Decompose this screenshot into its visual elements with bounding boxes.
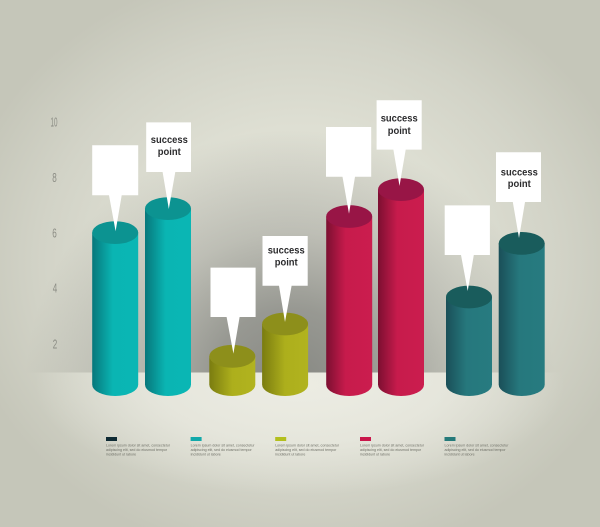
y axis labels: 8	[52, 171, 57, 185]
y axis labels: 6	[52, 226, 57, 240]
legend item 1	[106, 437, 171, 456]
callout 2: point	[158, 146, 181, 158]
callout 2: success	[151, 134, 188, 146]
callout 8: success	[501, 166, 538, 178]
y axis labels: 10	[50, 116, 58, 130]
legend item 4: Lorem ipsum dolor sit amet, consectetur	[360, 444, 425, 448]
legend item 1: adipiscing elit, sed do eiusmod tempor	[106, 448, 168, 452]
callout 6: success	[381, 113, 418, 125]
callout 6: point	[388, 125, 411, 137]
callout 3	[210, 268, 256, 354]
legend item 5: Lorem ipsum dolor sit amet, consectetur	[444, 444, 509, 448]
cylinder 3: olive	[209, 345, 255, 396]
legend item 2	[191, 437, 255, 456]
callout 4: success	[268, 244, 305, 256]
cylinder 5: crimson	[326, 205, 372, 396]
legend item 1: Lorem ipsum dolor sit amet, consectetur	[106, 444, 171, 448]
callout 5	[326, 127, 371, 214]
legend item 2: adipiscing elit, sed do eiusmod tempor	[191, 448, 253, 452]
y axis labels: 4	[53, 282, 57, 296]
legend item 4	[360, 437, 425, 456]
callout 6	[377, 100, 422, 186]
cylinder 1: teal	[92, 221, 138, 396]
cylinder 4: olive	[262, 313, 308, 396]
callout 4	[262, 236, 308, 322]
y axis labels	[50, 116, 58, 352]
y axis labels: 2	[53, 338, 57, 352]
legend item 4: adipiscing elit, sed do eiusmod tempor	[360, 448, 422, 452]
cylinder 7: dark teal	[446, 286, 492, 396]
callout 1	[92, 145, 138, 231]
legend item 3: Lorem ipsum dolor sit amet, consectetur	[275, 444, 340, 448]
legend item 3	[275, 437, 340, 456]
floor	[0, 372, 600, 527]
callout 7	[445, 205, 490, 291]
cylinder 8: dark teal	[499, 232, 545, 396]
callout 8: point	[508, 178, 531, 190]
cylinder 6: crimson	[378, 178, 424, 396]
legend item 5	[444, 437, 509, 456]
callout 4: point	[275, 256, 298, 268]
wall shadow	[0, 0, 600, 372]
legend item 4: incididunt ut labore	[360, 452, 390, 456]
cylinder 2: teal	[145, 197, 191, 396]
legend item 2: incididunt ut labore	[191, 452, 221, 456]
legend item 3: adipiscing elit, sed do eiusmod tempor	[275, 448, 337, 452]
legend item 2: Lorem ipsum dolor sit amet, consectetur	[191, 444, 255, 448]
legend item 1: incididunt ut labore	[106, 452, 136, 456]
legend item 3: incididunt ut labore	[275, 452, 305, 456]
legend item 5: incididunt ut labore	[444, 452, 475, 456]
callout 8	[496, 152, 541, 238]
callout 2	[146, 122, 191, 209]
legend item 5: adipiscing elit, sed do eiusmod tempor	[444, 448, 506, 452]
